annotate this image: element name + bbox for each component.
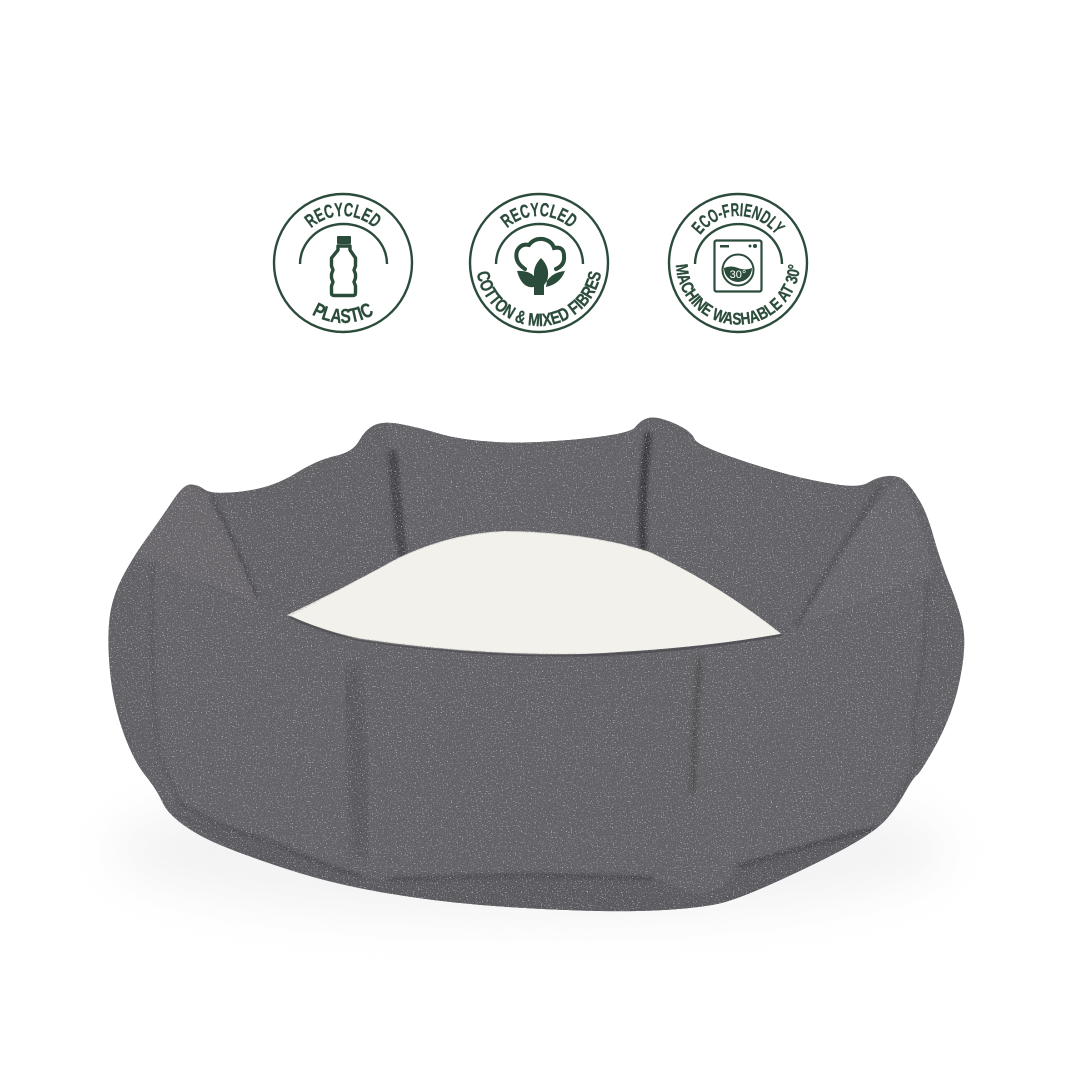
fabric grain (100, 410, 970, 920)
badge: eco-friendly machine washable (668, 192, 808, 334)
product infographic (108, 192, 964, 912)
badge text: plastic: PLASTIC (312, 302, 373, 324)
badge text: eco-friendly: ECO-FRIENDLY (690, 203, 786, 235)
cushion redraw over texture (290, 532, 780, 653)
bottom rim (165, 810, 877, 915)
dog bed (100, 410, 970, 920)
inner back wall panels (134, 420, 848, 602)
badge text: recycled: RECYCLED (304, 202, 381, 228)
front left panel (358, 640, 362, 641)
badge: recycled plastic (272, 192, 414, 334)
outer seam lines (152, 562, 927, 802)
badge text: machine washable: MACHINE WASHABLE AT 30° (676, 264, 800, 325)
badge text: cotton and mixed fibres: COTTON & MIXED FIBRES (477, 271, 601, 326)
front right panel (691, 634, 783, 893)
icon: washing machine: 30° (730, 269, 746, 281)
icon: cotton plant (516, 239, 565, 295)
fold shadows (212, 436, 880, 624)
badge: recycled cotton and mixed fibres (468, 192, 610, 334)
cushion (287, 531, 783, 655)
fabric speckle (100, 410, 970, 920)
left seam shadow (350, 665, 364, 860)
cushion rim fold shadow (290, 617, 782, 655)
badge text: recycled: RECYCLED (500, 202, 577, 228)
icon: bottle (332, 236, 356, 296)
soft floor shadow (110, 780, 950, 920)
front fold shadows (180, 660, 877, 879)
bed silhouette (108, 417, 964, 911)
front centre panel (362, 640, 704, 656)
